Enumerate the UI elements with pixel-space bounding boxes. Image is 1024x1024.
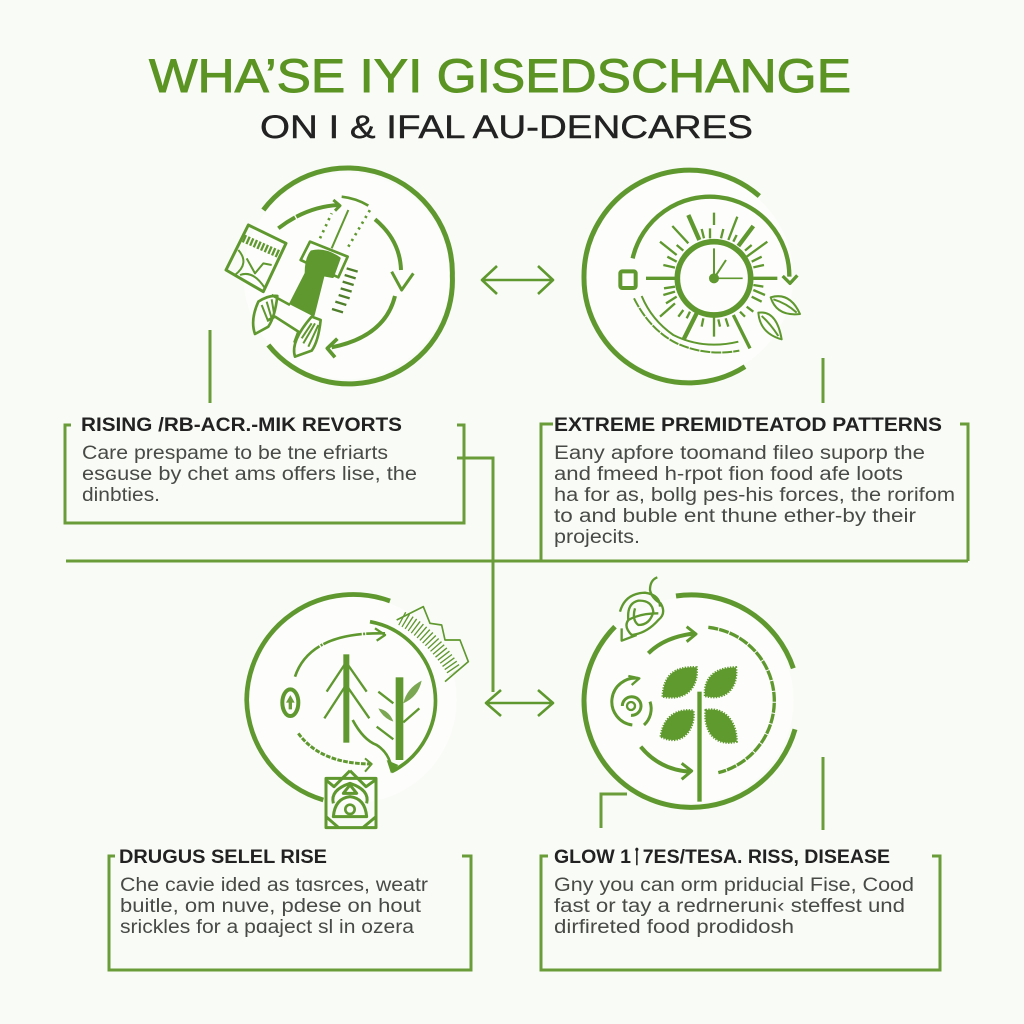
outer ring <box>584 595 795 807</box>
outer ring <box>263 168 452 384</box>
body text: ha for as, bollg pes-his forces, the rorifom <box>554 485 955 506</box>
body text <box>82 443 417 506</box>
cycle arrows <box>278 197 413 357</box>
body text <box>554 875 914 938</box>
body text: buitle, om nuve, pdese on hout <box>120 896 422 917</box>
panel: glow disease <box>541 847 940 970</box>
syringe <box>253 210 370 357</box>
body text: projecits. <box>554 527 640 548</box>
title: WHA’SE IYI GISEDSCHANGE <box>149 49 851 102</box>
heading: GLOW 1ᛙ7ES/TESA. RISS, DISEASE <box>554 847 890 868</box>
lower arcs <box>634 296 739 353</box>
heading: RISING /RB-ACR.-MIK REVORTS <box>81 415 402 436</box>
panel: rising reports <box>65 415 464 523</box>
body text <box>120 875 429 938</box>
panel frame <box>541 424 968 561</box>
body text: and fmeed h-rpot fion food afe loots <box>554 464 903 485</box>
body text: dinbties. <box>82 485 160 506</box>
leaves <box>758 296 800 339</box>
panel frame <box>109 856 471 970</box>
arrow: bottom double-headed <box>486 690 553 716</box>
inner arc and arrows <box>295 622 435 772</box>
body text: esɢuse by chet ams offers lise, the <box>82 464 417 485</box>
four-leaf plant <box>661 667 737 802</box>
inner arrows <box>641 627 774 779</box>
mountains <box>397 607 468 682</box>
heading: DRUGUS SELEL RISE <box>119 847 327 868</box>
icon: syringe cycle <box>226 168 452 384</box>
panel frame <box>65 425 464 523</box>
sun rays <box>646 213 777 348</box>
body text: Eany apfore toomand fileo suporp the <box>554 443 925 464</box>
panel: drugus selel rise <box>109 847 471 970</box>
snake <box>620 577 663 641</box>
icon: plant cycle <box>584 577 795 807</box>
plant <box>353 677 422 773</box>
body text: fast or tay a redrneruni‹ steffest und <box>554 896 905 917</box>
outer ring <box>247 594 390 800</box>
subtitle: ON I & IFAL AU-DENCARES <box>260 109 753 145</box>
body text <box>554 443 955 548</box>
spiral <box>612 676 651 725</box>
arrow: top double-headed <box>482 266 553 294</box>
outer ring <box>584 170 759 383</box>
panel: extreme patterns <box>541 415 968 561</box>
icon: forest cycle <box>247 594 468 828</box>
panel frame <box>541 856 940 970</box>
body text: Gny you can orm priducial Fise, Cood <box>554 875 914 896</box>
inner arrow <box>633 197 797 283</box>
title <box>149 49 851 145</box>
small leaf badge <box>282 689 298 716</box>
heading: EXTREME PREMIDTEATOD PATTERNS <box>554 415 942 436</box>
tree <box>324 654 369 743</box>
lotus box <box>326 771 376 828</box>
connector lines between panels <box>66 330 968 830</box>
body text: Ϲhe cavie ided as tɑsrces, weatr <box>120 875 429 896</box>
small square <box>620 271 636 288</box>
body text: Care prespame to be tne efriarts <box>82 443 388 464</box>
clock face <box>677 242 751 315</box>
body text: to and buble ent thune ether-by their <box>554 506 917 527</box>
body text: dirfireted food prodidosh <box>554 917 794 938</box>
food box <box>226 225 286 292</box>
body text: srickles for a pɑaject sl in ozera <box>120 917 414 938</box>
icon: sun clock <box>584 170 800 383</box>
